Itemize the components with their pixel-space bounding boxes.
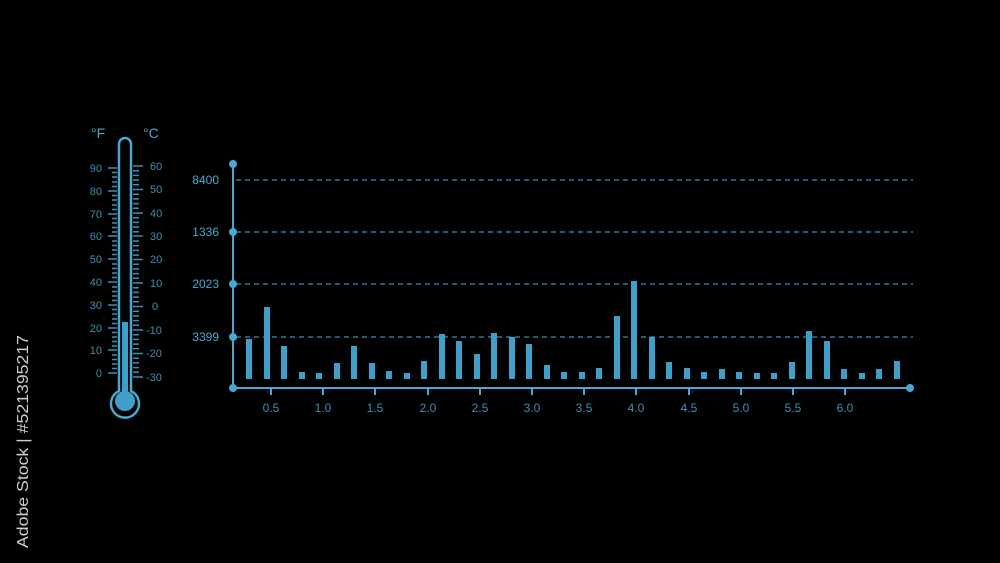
x-axis labels: 4.0: [628, 401, 645, 415]
x-axis labels: 5.5: [785, 401, 802, 415]
celsius scale: [133, 166, 143, 377]
side id text: Adobe Stock | #521395217: [15, 335, 32, 548]
bars: [246, 281, 900, 379]
x-axis labels: 3.0: [524, 401, 541, 415]
gridlines: [236, 180, 913, 337]
thermometer: 50: [150, 184, 162, 196]
x-axis labels: 5.0: [733, 401, 750, 415]
x-axis labels: 1.5: [367, 401, 384, 415]
thermometer: 30: [90, 300, 102, 312]
tube: [111, 138, 139, 418]
thermometer: 40: [90, 277, 102, 289]
y-axis labels: [192, 173, 219, 344]
thermometer: 50: [90, 254, 102, 266]
thermometer: 90: [90, 163, 102, 175]
x-axis labels: 0.5: [263, 401, 280, 415]
y-axis labels: 2023: [192, 277, 219, 291]
axes: [230, 161, 913, 395]
unit labels: °F: [91, 125, 105, 141]
x-axis labels: 1.0: [315, 401, 332, 415]
thermometer: 0: [152, 301, 158, 313]
y-axis labels: 1336: [192, 225, 219, 239]
unit labels: [91, 125, 159, 141]
y-axis labels: 8400: [192, 173, 219, 187]
fahrenheit scale: [108, 168, 117, 373]
thermometer: 60: [90, 231, 102, 243]
thermometer: 60: [150, 161, 162, 173]
unit labels: °C: [143, 125, 159, 141]
x-axis labels: 3.5: [576, 401, 593, 415]
thermometer: 0: [96, 368, 102, 380]
thermometer: 70: [90, 209, 102, 221]
x-axis labels: 4.5: [681, 401, 698, 415]
thermometer: 20: [150, 254, 162, 266]
thermometer: 20: [90, 323, 102, 335]
thermometer: [90, 125, 162, 418]
thermometer: -10: [146, 325, 162, 337]
thermometer: 10: [150, 278, 162, 290]
thermometer: -30: [146, 372, 162, 384]
thermometer: 80: [90, 186, 102, 198]
x-axis labels: [263, 401, 854, 415]
thermometer: 40: [150, 208, 162, 220]
x-axis labels: 2.5: [472, 401, 489, 415]
thermometer: -20: [146, 348, 162, 360]
bar chart: [192, 161, 913, 415]
x-axis labels: 6.0: [837, 401, 854, 415]
x-axis labels: 2.0: [420, 401, 437, 415]
thermometer: 10: [90, 345, 102, 357]
y-axis labels: 3399: [192, 330, 219, 344]
thermometer: 30: [150, 231, 162, 243]
